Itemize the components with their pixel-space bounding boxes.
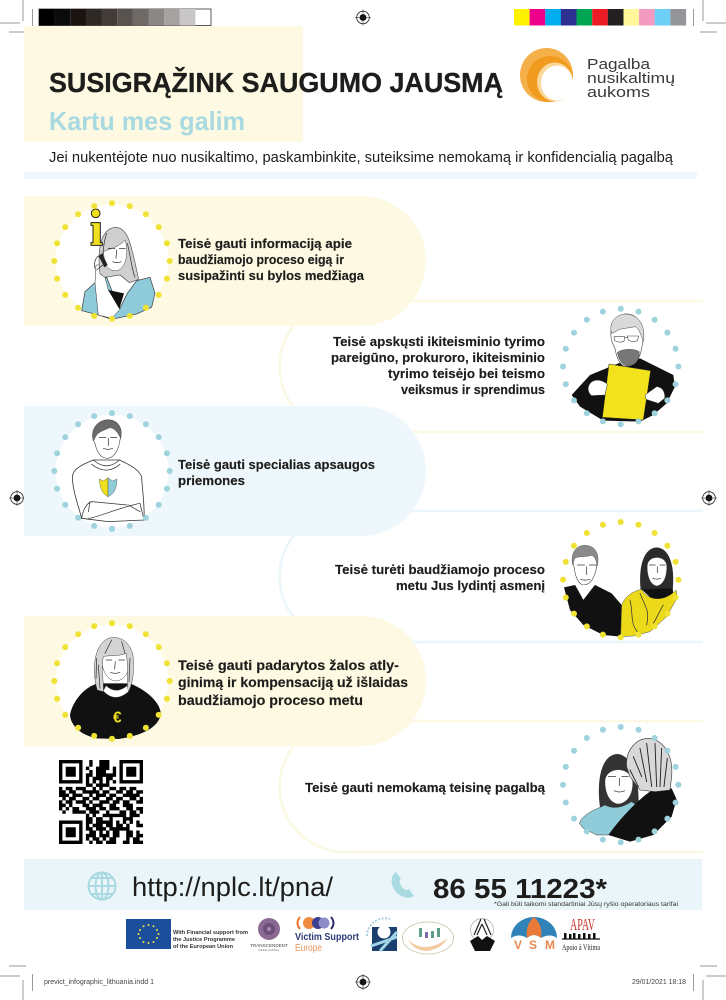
contact band: [24, 859, 702, 910]
text: baudžiamojo proceso metu: [178, 692, 363, 708]
registration mark: top: [355, 10, 371, 26]
right: accompanying person: [335, 519, 681, 640]
subtitle: Kartu mes galim: [49, 106, 245, 136]
logo: APAV: APAV: [570, 915, 595, 934]
print slug: file name: previct_infographic_lithuania.indd 1: [44, 977, 154, 986]
website URL: http://nplc.lt/pna/: [132, 872, 334, 902]
panel: left 1 yellow: [24, 196, 426, 326]
logo: Pagalba nusikaltimų aukoms: nusikaltimų: [587, 71, 675, 87]
logo: Victim Support Europe: Europe: [295, 943, 322, 954]
registration mark: right: [701, 490, 717, 506]
panel: right 2 outline: [280, 511, 703, 642]
logo: APAV: [562, 915, 600, 952]
dots ring: [51, 620, 173, 742]
title: SUSIGRĄŽINK SAUGUMO JAUSMĄ: [49, 67, 503, 98]
illustration: woman on the phone with info sign: [82, 209, 155, 319]
header yellow block: [24, 26, 303, 142]
icon: telephone: [392, 872, 414, 898]
text: ginimą ir kompensaciją už išlaidas: [178, 674, 408, 690]
logo: VSM umbrella: V: [514, 938, 522, 952]
dots ring: [560, 519, 681, 640]
logo: VSM umbrella: S: [529, 938, 537, 952]
logo: black hands: [470, 918, 495, 951]
dots ring: [51, 200, 173, 322]
text: Teisė gauti padarytos žalos atly-: [178, 657, 399, 673]
text: metu Jus lydintį asmenį: [396, 578, 545, 593]
logo: Victim Support Europe: [295, 917, 360, 954]
logo: VSM umbrella: M: [545, 938, 555, 952]
phone number: 86 55 11223*: [433, 873, 607, 904]
text: Teisė gauti specialias apsaugos: [178, 457, 375, 472]
illustration: person with euro on black hoodie: €: [113, 710, 122, 727]
logo: European Union: of the European Union: [173, 944, 234, 950]
illustration: man and woman: [564, 545, 677, 637]
registration mark: bottom: [355, 974, 371, 990]
logo: Victim Support Europe: Victim Support: [295, 932, 360, 943]
text: Teisė apskųsti ikiteisminio tyrimo: [333, 334, 545, 349]
panel: right 3 outline: [280, 721, 703, 852]
logo: hands and families: [402, 922, 454, 954]
logo: support centre ribbon: [367, 918, 397, 951]
tariff note: *Gali būti taikomi standartiniai Jūsų ryšio operatoriaus tarifai: [494, 901, 678, 908]
logo: Pagalba nusikaltimų aukoms: aukoms: [587, 85, 650, 101]
text: susipažinti su bylos medžiaga: [178, 268, 365, 283]
text: pareigūno, prokuroro, ikiteisminio: [331, 350, 545, 365]
panel: right 1 outline: [280, 301, 703, 432]
text: [331, 334, 545, 397]
text: veiksmus ir sprendimus: [401, 382, 545, 397]
text: priemones: [178, 473, 245, 488]
logo: European Union: With Financial support from: [173, 930, 248, 936]
text: Teisė turėti baudžiamojo proceso: [335, 562, 545, 577]
dots ring: [560, 306, 681, 427]
print slug: date: 29/01/2021 18:18: [632, 977, 686, 986]
right: free legal aid: [305, 724, 681, 845]
text: Teisė gauti informaciją apie: [178, 236, 352, 251]
text: [335, 562, 545, 593]
header divider band: [24, 172, 697, 179]
text: Teisė gauti nemokamą teisinę pagalbą: [305, 780, 546, 795]
text: [178, 657, 408, 708]
text: tyrimo teisėjo bei teismo: [388, 366, 545, 381]
logo: VSM umbrella: [511, 917, 557, 952]
right: information: [51, 200, 365, 322]
right: protection measures: [51, 410, 375, 532]
colour calibration bar: [514, 9, 686, 26]
text: baudžiamojo proceso eigą ir: [178, 252, 344, 267]
panel: left 3 yellow: [24, 616, 426, 746]
panel: left 2 blue: [24, 406, 426, 536]
logo: European Union: the Justice Programme: [173, 937, 235, 943]
logo: Transcendent: [250, 918, 288, 952]
illustration: person with euro on black hoodie: [70, 637, 161, 739]
dots ring: [51, 410, 173, 532]
logo: European Union: [126, 919, 248, 950]
text: [178, 457, 375, 488]
QR code: [59, 762, 143, 842]
illustration: man with crossed arms and shield: [72, 420, 144, 522]
logo: Pagalba nusikaltimų aukoms: Pagalba: [587, 57, 651, 73]
right: complaint about actions: [331, 306, 681, 427]
intro sentence: Jei nukentėjote nuo nusikaltimo, paskambinkite, suteiksime nemokamą ir konfidencialią pagalbą: [49, 150, 674, 166]
icon: globe: [88, 872, 116, 900]
logo: Transcendent: TRANSCENDENT: [250, 943, 288, 948]
dots ring: [560, 724, 681, 845]
registration mark: left: [9, 490, 25, 506]
text: [178, 236, 365, 283]
illustration: two people embracing: [579, 738, 677, 842]
right: compensation: [51, 620, 408, 742]
logo: Transcendent: MEDIA CAPITAL: [259, 948, 280, 952]
logo: APAV: Apoio à Vítima: [562, 943, 600, 952]
logo: Pagalba nusikaltimų aukoms: [520, 48, 675, 102]
illustration: bearded man holding a yellow sheet: [572, 314, 675, 422]
greyscale calibration bar: [39, 9, 211, 26]
